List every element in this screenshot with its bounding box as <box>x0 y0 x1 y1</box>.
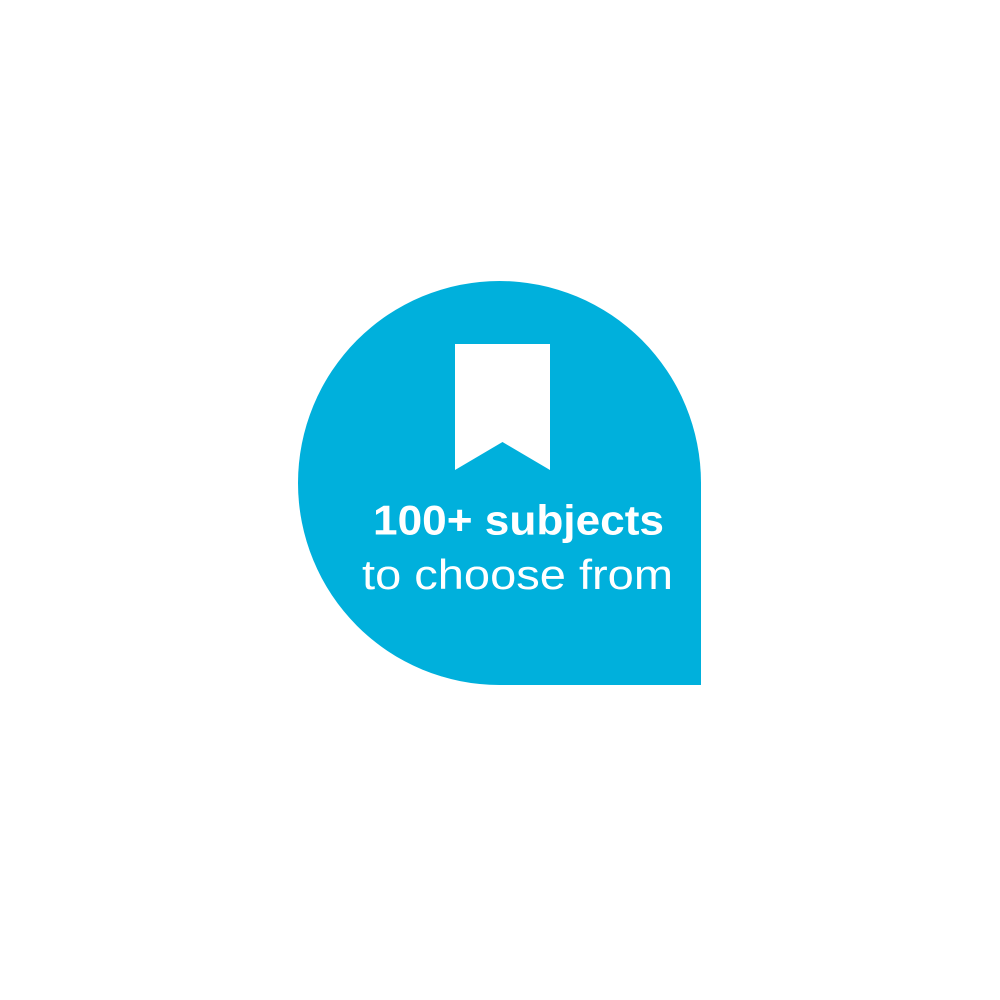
text: to choose from: to choose from <box>362 551 673 598</box>
heading: 100+ subjects: 100+ subjects <box>373 496 664 544</box>
icon: bookmark ribbon <box>455 344 550 470</box>
badge: teardrop speech shape <box>298 281 701 685</box>
